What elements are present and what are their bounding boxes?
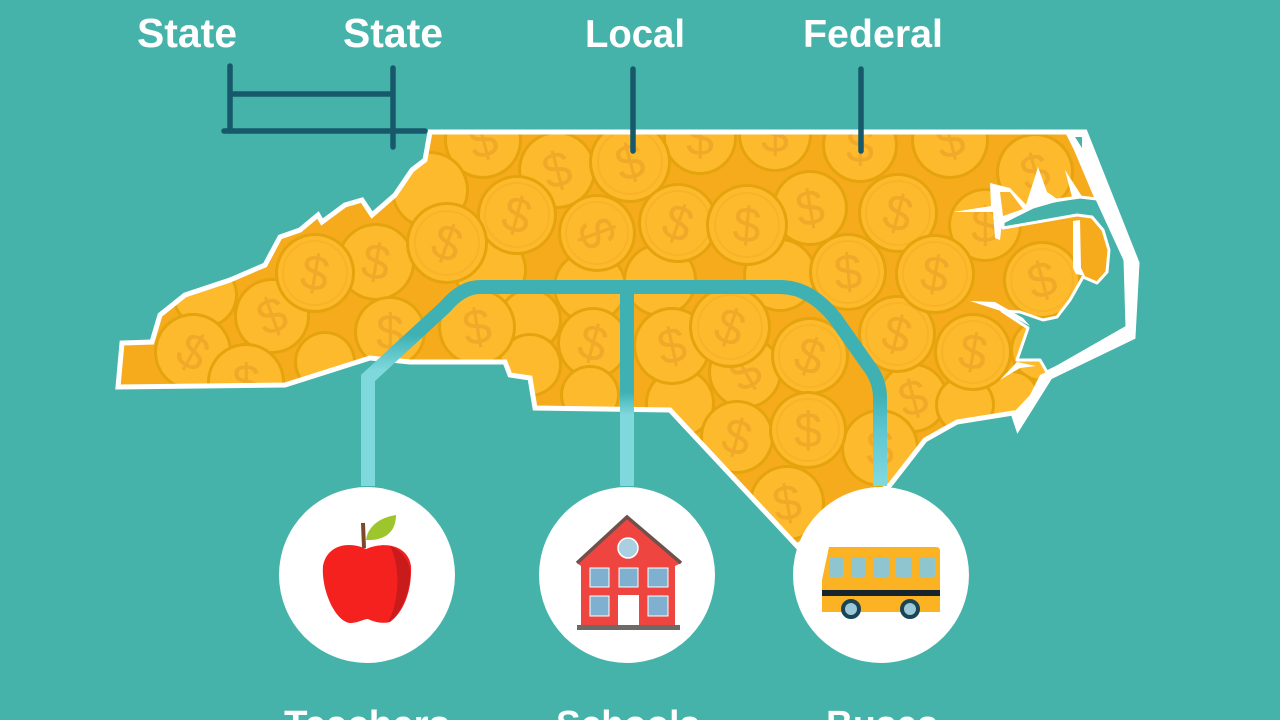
coin pile: $ <box>609 131 651 193</box>
coin pile: $ <box>462 109 504 171</box>
coin pile: $ <box>787 325 833 387</box>
state outline <box>118 132 1137 546</box>
coin pile: $ <box>832 243 864 301</box>
coin pile: $ <box>707 296 753 358</box>
coin pile: $ <box>536 139 578 201</box>
coin pile: $ <box>877 182 919 244</box>
coin pile: $ <box>249 285 295 347</box>
coin pile: $ <box>232 354 260 410</box>
coin pile: $ <box>731 196 763 254</box>
coin pile: $ <box>719 341 771 403</box>
coin pile: $ <box>357 232 395 292</box>
coin pile: $ <box>376 304 404 360</box>
heading: Local: Local <box>585 13 685 56</box>
coin pile: $ <box>761 107 789 163</box>
icon: school house <box>577 517 681 630</box>
coin pile: $ <box>1021 249 1063 311</box>
connector lines: funding sources <box>224 66 861 151</box>
coin pile: $ <box>929 109 971 171</box>
coin pile: $ <box>655 192 701 254</box>
coin pile: $ <box>1014 141 1056 203</box>
map: North Carolina filled with coins <box>115 130 1140 550</box>
heading: Federal: Federal <box>803 13 943 56</box>
coin pile: $ <box>458 297 496 357</box>
coin pile: $ <box>424 212 470 274</box>
coin pile: $ <box>954 322 992 382</box>
coin pile: $ <box>794 402 822 458</box>
icon circle: teachers <box>279 487 455 663</box>
coin pile: $ <box>496 184 538 246</box>
coin pile: $ <box>686 110 714 166</box>
coin pile: $ <box>566 210 628 256</box>
coin pile: $ <box>846 117 874 173</box>
icon: school bus <box>822 547 940 617</box>
barrier islands strip <box>1013 132 1137 428</box>
coin pile: $ <box>892 367 934 429</box>
coin pile: $ <box>791 178 829 238</box>
coin pile: $ <box>876 303 918 365</box>
inlets and coastal details <box>953 137 1085 380</box>
icon circle: buses <box>793 487 969 663</box>
coin pile: $ <box>916 244 954 304</box>
coin pile: $ <box>296 243 334 303</box>
coin pile: $ <box>167 321 219 383</box>
coin pile: $ <box>768 473 806 533</box>
coin pile: $ <box>653 316 691 376</box>
coin pile: $ <box>716 406 758 468</box>
coastal sounds <box>1002 197 1127 372</box>
icon circle: schools <box>539 487 715 663</box>
pipes: funding distribution <box>368 287 880 486</box>
coin pile <box>120 134 1108 543</box>
coin pile: $ <box>572 312 614 374</box>
heading: State left: State <box>137 10 237 56</box>
icon: apple <box>323 515 411 623</box>
coin pile: $ <box>971 197 999 253</box>
heading: State right: State <box>343 10 443 56</box>
coin pile: $ <box>866 420 894 476</box>
